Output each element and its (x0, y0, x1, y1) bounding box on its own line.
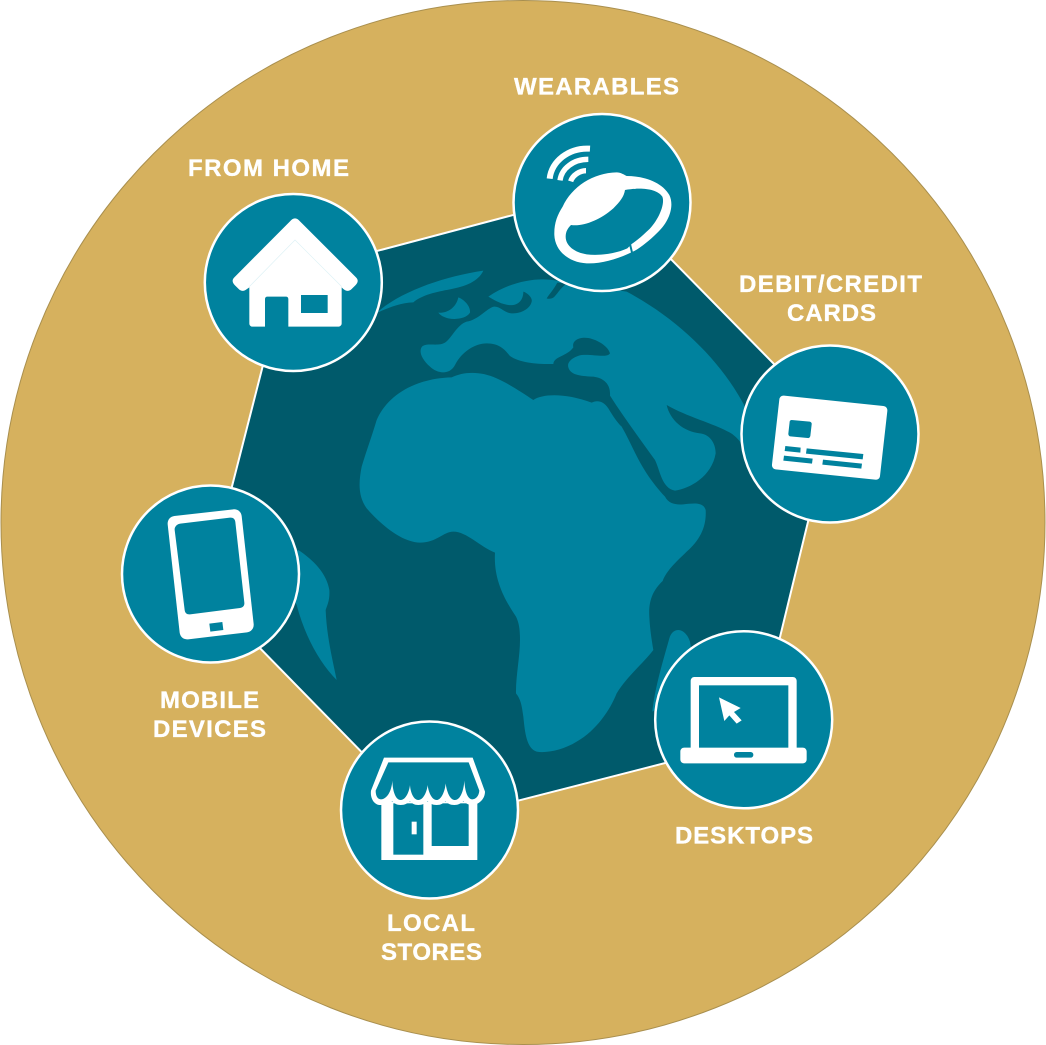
globe hexagon (205, 191, 832, 823)
continent: Eurasia and Arabia (421, 279, 747, 491)
node: desktops (655, 631, 832, 808)
label: debit/credit cards: CARDS (787, 300, 876, 327)
icon: smartphone (168, 509, 254, 639)
label: mobile devices (153, 687, 266, 743)
label: desktops: DESKTOPS (675, 822, 813, 850)
landmass: Greenland sliver (376, 271, 483, 313)
label: from home: FROM HOME (188, 155, 349, 182)
island: Madagascar (652, 630, 697, 712)
globe continents (360, 271, 747, 752)
continent: Africa (360, 373, 706, 752)
label: local stores (381, 910, 482, 966)
label: mobile devices: DEVICES (153, 716, 266, 743)
node: debit/credit cards (742, 346, 918, 522)
node: from home (205, 194, 382, 371)
icon: laptop with cursor (680, 677, 807, 763)
sea: White Sea inlet (547, 283, 567, 299)
label: local stores: STORES (381, 939, 482, 966)
node: wearables (514, 114, 690, 291)
continent: South America (273, 550, 337, 680)
label: debit/credit cards: DEBIT/CREDIT (739, 271, 922, 298)
node: local stores (341, 722, 518, 898)
icon: wristband with signal (550, 149, 671, 263)
label: debit/credit cards (739, 271, 922, 327)
island: Britain (438, 297, 470, 319)
label: wearables: WEARABLES (514, 74, 679, 100)
icon: house (233, 218, 358, 327)
node: mobile devices (122, 486, 299, 662)
icon: storefront (371, 758, 485, 860)
label: mobile devices: MOBILE (160, 687, 259, 714)
label: local stores: LOCAL (387, 910, 475, 937)
icon: payment card (772, 396, 887, 480)
